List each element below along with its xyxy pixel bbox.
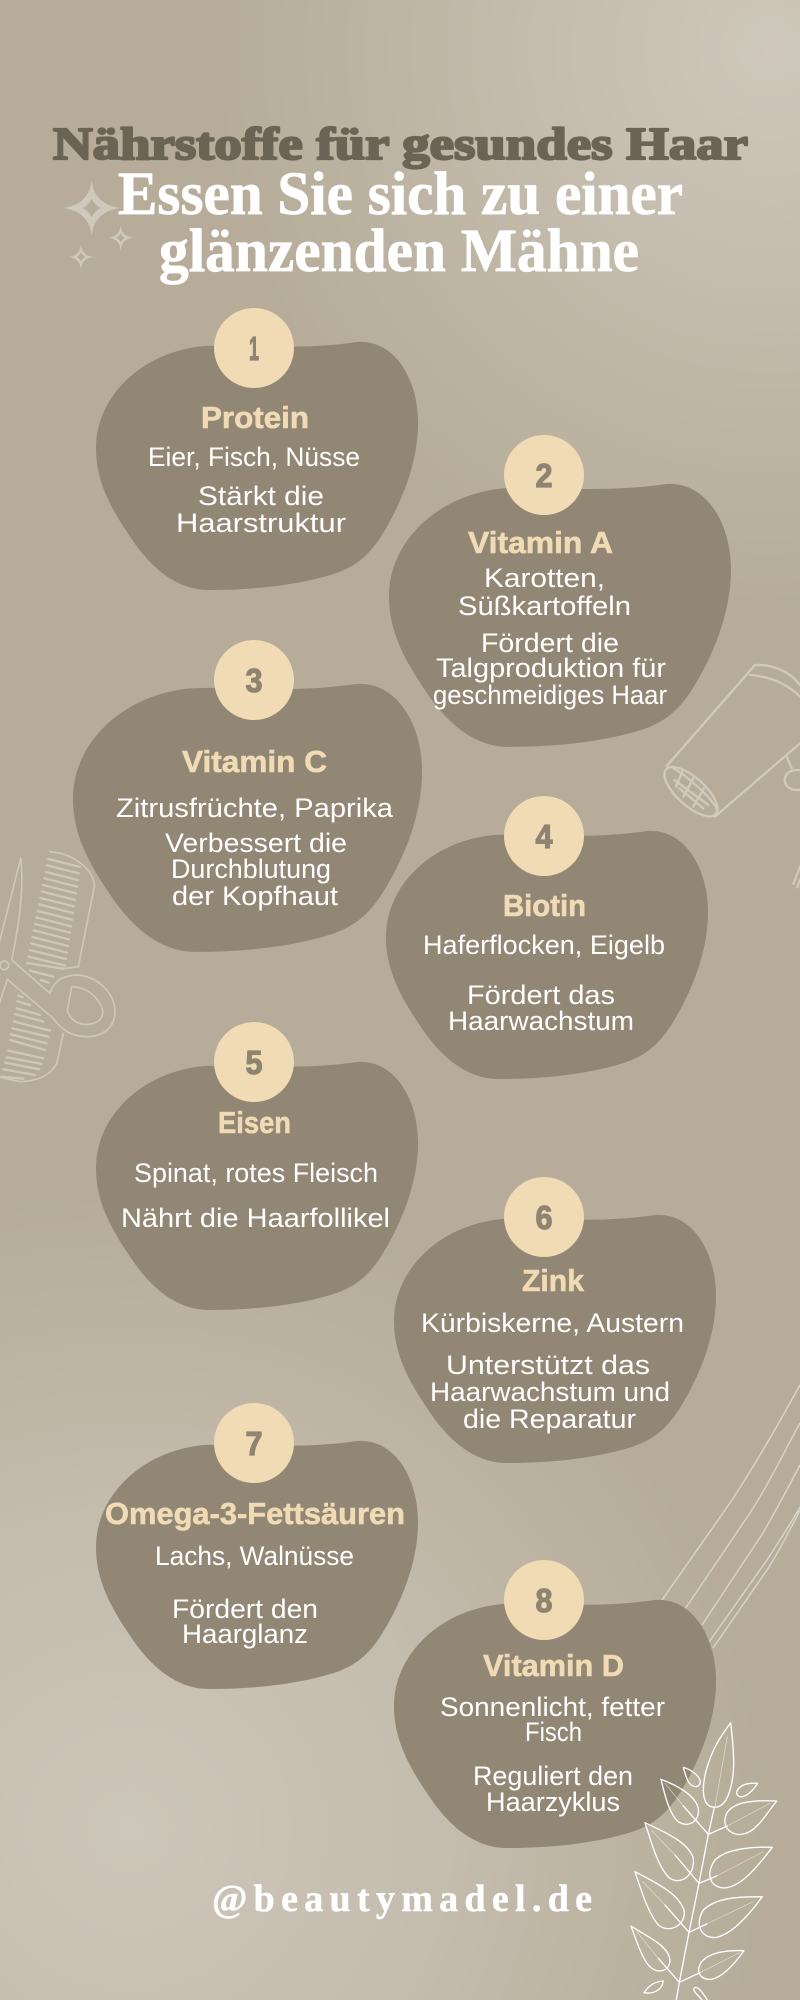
subtitle: Essen Sie sich zu einer	[118, 161, 683, 228]
number badge 2: 2	[536, 457, 552, 494]
heading: Eisen	[218, 1105, 291, 1140]
text	[421, 1308, 684, 1434]
text: Haarwachstum und	[430, 1377, 670, 1407]
blob	[96, 1441, 418, 1689]
blob	[96, 342, 418, 590]
text: geschmeidiges Haar	[433, 680, 667, 710]
footer handle: @beautymadel.de	[212, 1878, 592, 1920]
text: Fördert die	[481, 628, 619, 658]
text: Verbessert die	[165, 828, 347, 858]
number badge 3: 3	[246, 662, 262, 699]
subtitle: glänzenden Mähne	[159, 218, 639, 285]
icon: leaf branch	[631, 1723, 777, 2000]
title: Nährstoffe für gesundes Haar	[53, 118, 748, 169]
text: Spinat, rotes Fleisch	[134, 1158, 378, 1188]
number badge 5: 5	[246, 1044, 262, 1081]
text: Haferflocken, Eigelb	[423, 930, 665, 960]
number badge 6	[504, 1177, 584, 1257]
text: Sonnenlicht, fetter	[440, 1692, 665, 1722]
number badge 8	[504, 1560, 584, 1640]
blob	[394, 1600, 716, 1848]
number badge 4	[504, 796, 584, 876]
icon: sparkles	[64, 180, 134, 270]
text	[440, 1692, 665, 1817]
text	[155, 1541, 354, 1649]
text: Zitrusfrüchte, Paprika	[116, 793, 394, 823]
number badge 7: 7	[246, 1425, 262, 1462]
number badge 3	[214, 640, 294, 720]
icon: scissors and comb	[0, 852, 115, 1082]
panel: Eisen card	[96, 1022, 418, 1310]
number badge 8: 8	[536, 1582, 552, 1619]
text: Fördert das	[467, 980, 615, 1010]
text: Haarstruktur	[176, 508, 346, 538]
text: die Reparatur	[463, 1404, 636, 1434]
number badge 1: 1	[249, 330, 259, 367]
panel: Protein card	[96, 308, 418, 590]
text	[121, 1158, 390, 1233]
blob	[394, 1215, 716, 1463]
heading: Omega-3-Fettsäuren	[105, 1496, 405, 1531]
heading: Protein	[201, 400, 309, 435]
icon: hair dryer	[657, 665, 800, 887]
text: Lachs, Walnüsse	[155, 1541, 354, 1571]
number badge 1	[214, 308, 294, 388]
number badge 5	[214, 1022, 294, 1102]
text	[116, 793, 394, 911]
number badge 6: 6	[536, 1199, 552, 1236]
text: Reguliert den	[473, 1761, 633, 1791]
text	[423, 930, 665, 1036]
blob	[96, 1062, 418, 1310]
panel: Vitamin A card	[389, 435, 731, 747]
text: Kürbiskerne, Austern	[421, 1308, 684, 1338]
text: Haarzyklus	[486, 1787, 620, 1817]
text: Unterstützt das	[446, 1350, 650, 1380]
text: Stärkt die	[198, 481, 324, 511]
text: Durchblutung	[171, 854, 331, 884]
text: Fisch	[525, 1717, 582, 1747]
number badge 4: 4	[536, 818, 553, 855]
panel: Vitamin D card	[394, 1560, 716, 1848]
panel: Biotin card	[386, 796, 708, 1079]
number badge 2	[504, 435, 584, 515]
blob	[389, 484, 731, 747]
blob	[386, 831, 708, 1079]
text: Nährt die Haarfollikel	[121, 1203, 390, 1233]
panel: Zink card	[394, 1177, 716, 1463]
text: Karotten,	[484, 563, 605, 593]
text: der Kopfhaut	[172, 881, 339, 911]
text	[148, 442, 360, 538]
text: Haarglanz	[182, 1619, 308, 1649]
icon: hair strand lines	[662, 1385, 800, 1648]
text	[433, 563, 667, 710]
text: Haarwachstum	[448, 1006, 634, 1036]
heading: Zink	[522, 1263, 585, 1298]
panel: Omega-3 card	[96, 1403, 418, 1689]
subtitle	[118, 161, 683, 285]
text: Eier, Fisch, Nüsse	[148, 442, 360, 472]
text: Süßkartoffeln	[458, 591, 631, 621]
text: Fördert den	[172, 1594, 318, 1624]
heading: Vitamin A	[468, 525, 613, 560]
heading: Biotin	[503, 888, 586, 923]
number badge 7	[214, 1403, 294, 1483]
text: Talgproduktion für	[436, 653, 666, 683]
heading: Vitamin D	[483, 1648, 624, 1683]
heading: Vitamin C	[182, 744, 327, 779]
blob	[73, 684, 422, 952]
panel: Vitamin C card	[73, 640, 422, 952]
